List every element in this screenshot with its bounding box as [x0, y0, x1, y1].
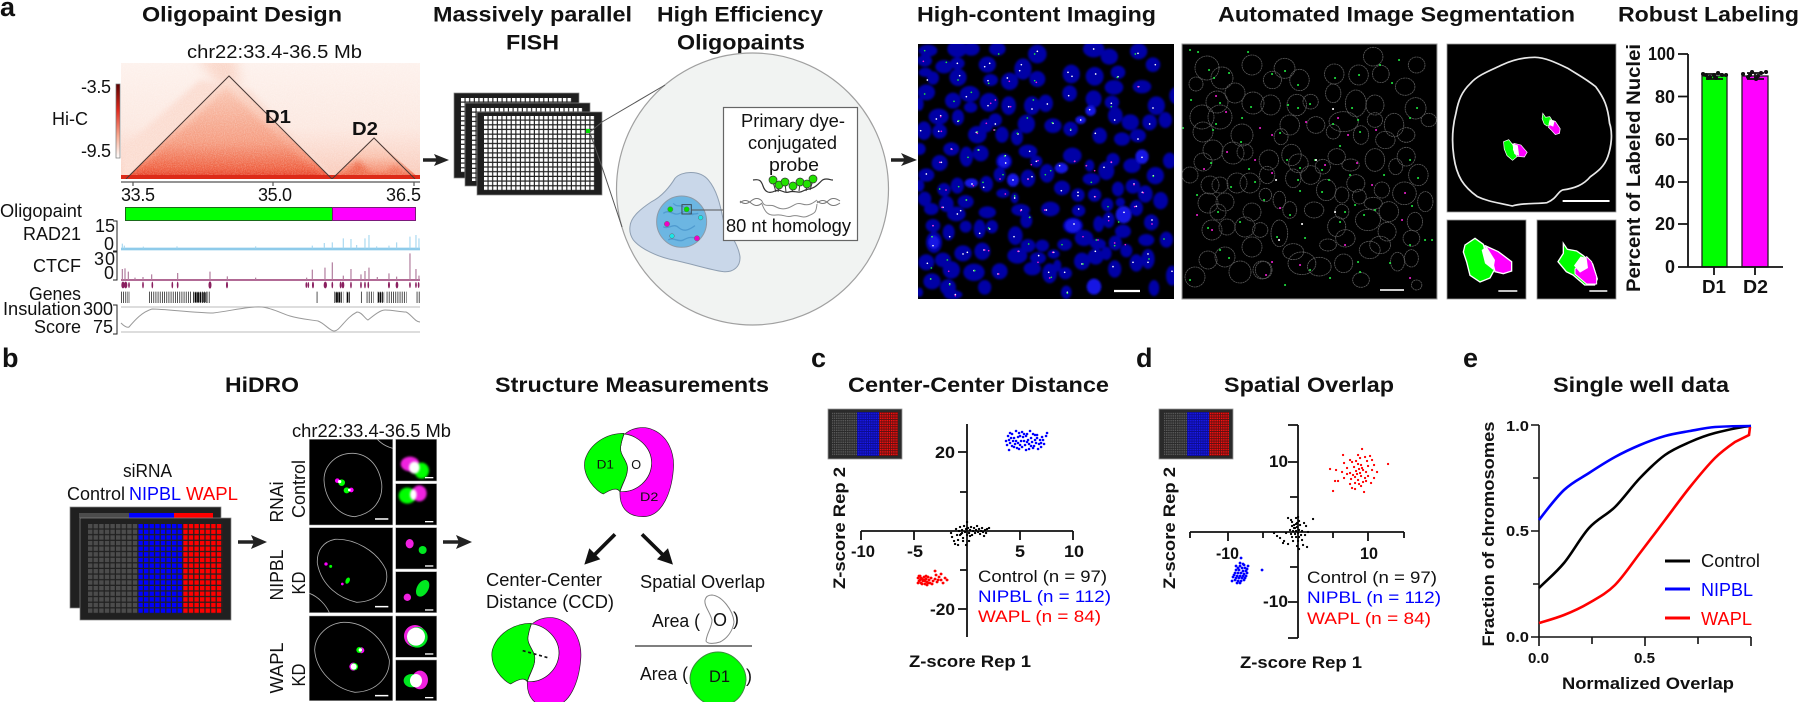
title: Robust Labeling [1618, 2, 1799, 26]
track: insulation score: Score [34, 317, 81, 337]
track: insulation score [3, 299, 420, 337]
axes: 1.0 [1506, 418, 1529, 435]
arrow: plates to images [238, 535, 267, 549]
axes: 20 [935, 443, 955, 462]
track: insulation score: 300 [83, 299, 113, 319]
WAPL foci [349, 625, 433, 698]
siRNA plates [70, 507, 231, 620]
x axis title: Normalized Overlap [1562, 674, 1734, 693]
mini plate [1159, 409, 1233, 459]
panel: high efficiency oligopaints [590, 2, 888, 325]
track: genes: Genes [29, 284, 81, 304]
arrow: images to measurements [443, 535, 472, 549]
track: insulation score: 75 [93, 317, 113, 337]
legend: WAPL [1701, 609, 1752, 629]
title: High Efficiency [657, 2, 823, 26]
scatter: control [1274, 517, 1313, 549]
segmentation image [1182, 44, 1437, 299]
track: RAD21: RAD21 [23, 224, 81, 244]
scatter: WAPL [1330, 449, 1388, 492]
panel label b: b [2, 343, 18, 373]
microscopy image [914, 41, 1181, 299]
segmented nucleus, large [1447, 44, 1616, 212]
label D2: D2 [352, 119, 378, 139]
scatter: NIPBL [1006, 431, 1047, 450]
title: FISH [506, 30, 559, 54]
overlap formula: D1 [709, 667, 730, 686]
label: center-center distance: Distance (CCD) [486, 592, 614, 612]
legend [1665, 551, 1760, 629]
probe inset box [724, 108, 858, 240]
label D1: D1 [265, 107, 291, 127]
heatmap: Hi-C [121, 55, 420, 179]
bar chart: 100 [1648, 44, 1675, 64]
axes: -10 [1263, 592, 1288, 611]
colour scale: Hi-C [52, 109, 88, 129]
bar chart: D2 [1743, 277, 1768, 297]
title: Spatial Overlap [1224, 373, 1394, 397]
panel label c: c [811, 343, 826, 373]
condition labels [267, 460, 309, 694]
axes: 0.0 [1506, 629, 1529, 646]
curve: NIPBL [1539, 426, 1751, 520]
oligopaint track [0, 201, 416, 221]
label: center-center distance: Center-Center [486, 570, 602, 590]
arrow: Hi-C to plates [423, 154, 449, 166]
panel: oligopaint design [0, 2, 421, 337]
axes: 0.5 [1506, 523, 1529, 540]
legend: NIPBL (n = 112) [978, 587, 1111, 606]
domain overlap diagram: D2 [640, 490, 659, 504]
track: RAD21: 15 [95, 216, 115, 236]
scatter: NIPBL [1232, 558, 1262, 583]
title: Oligopaints [677, 30, 805, 54]
bar chart: 40 [1655, 172, 1675, 192]
y axis title: Z-score Rep 2 [1160, 467, 1179, 589]
microscopy grid [309, 439, 437, 701]
y axis title: Fraction of chromosomes [1479, 422, 1498, 646]
track: CTCF: CTCF [33, 256, 81, 276]
panel: massively parallel FISH [433, 2, 632, 195]
legend: Control [1701, 551, 1760, 571]
title: Massively parallel [433, 2, 632, 26]
title: Single well data [1553, 373, 1730, 397]
region label: chr22:33.4-36.5 Mb [187, 42, 362, 62]
scatter: WAPL [918, 571, 947, 585]
condition labels: Control [289, 460, 309, 518]
cell illustration [630, 173, 740, 272]
axes: -10 [1216, 544, 1239, 563]
domain overlap diagram [585, 428, 674, 517]
bar chart [1648, 44, 1783, 297]
panel: spatial overlap scatter [1159, 373, 1441, 672]
panel: high-content imaging [914, 2, 1181, 299]
bar chart: 0 [1665, 257, 1675, 277]
axes: -5 [907, 542, 923, 561]
x axis title: Z-score Rep 1 [909, 652, 1031, 671]
legend: WAPL (n = 84) [978, 607, 1101, 626]
probe text: conjugated [748, 133, 837, 153]
genomic axis: 36.5 [386, 185, 421, 205]
siRNA labels: Control [67, 484, 125, 504]
arrow: to center-center distance [584, 534, 615, 565]
panel: single well data [1479, 373, 1760, 693]
axes: 10 [1064, 542, 1084, 561]
bar chart: D1 [1702, 277, 1726, 297]
legend [1307, 568, 1441, 628]
siRNA labels [67, 461, 238, 504]
legend: NIPBL (n = 112) [1307, 588, 1441, 607]
y axis title: Percent of Labeled Nuclei [1624, 44, 1645, 292]
panel: robust labeling [1618, 2, 1799, 297]
genomic axis: 35.0 [258, 185, 292, 205]
siRNA labels: WAPL [186, 484, 238, 504]
magnifier circle [616, 53, 888, 325]
overlap formula [635, 595, 752, 702]
foci [664, 207, 703, 241]
arrow: probes to imaging [891, 153, 917, 166]
axes [851, 424, 1084, 637]
bar chart: 60 [1655, 130, 1675, 150]
axes: 10 [1269, 452, 1288, 471]
axes: -20 [930, 600, 955, 619]
plate stack [454, 93, 602, 195]
panel: structure measurements [486, 373, 769, 702]
NIPBL foci [324, 539, 433, 610]
track: CTCF: 30 [94, 249, 115, 269]
condition labels: WAPL [267, 642, 287, 694]
panel: HiDRO [67, 373, 472, 701]
title [657, 2, 823, 54]
zoom lines [590, 85, 665, 227]
axes: 0.5 [1634, 650, 1655, 667]
control foci [335, 457, 433, 522]
x axis title: Z-score Rep 1 [1240, 653, 1362, 672]
nucleus [657, 196, 707, 247]
region label: chr22:33.4-36.5 Mb [292, 421, 451, 441]
condition labels: KD [289, 572, 309, 594]
y axis title: Z-score Rep 2 [830, 467, 849, 589]
axes: 10 [1360, 544, 1378, 563]
overlap formula: ) [733, 609, 739, 629]
legend: Control (n = 97) [978, 567, 1107, 586]
axes: 0.0 [1528, 650, 1549, 667]
overlap formula: ) [746, 666, 752, 686]
condition labels: NIPBL [267, 550, 287, 600]
bar chart: 80 [1655, 87, 1675, 107]
domain overlap diagram: O [631, 458, 641, 472]
probe text: probe [769, 155, 819, 175]
oligopaint track: Oligopaint [0, 201, 82, 221]
mini plate [828, 409, 902, 459]
probe text [726, 111, 851, 236]
panel label e: e [1463, 343, 1478, 373]
title: HiDRO [225, 373, 299, 397]
curve: WAPL [1539, 427, 1750, 623]
domain overlap diagram: D1 [597, 457, 614, 471]
siRNA labels: siRNA [123, 461, 172, 481]
title: Structure Measurements [495, 373, 769, 397]
legend: Control (n = 97) [1307, 568, 1437, 587]
genomic axis [121, 182, 421, 205]
title [433, 2, 632, 54]
CCD diagram [492, 618, 581, 702]
axes [1506, 418, 1751, 667]
track: RAD21 [23, 216, 420, 254]
track: CTCF [33, 249, 420, 289]
zoom crops [1447, 220, 1616, 299]
title: Center-Center Distance [848, 373, 1109, 397]
bar chart: 20 [1655, 214, 1675, 234]
legend: NIPBL [1701, 580, 1753, 600]
probe text: Primary dye- [741, 111, 845, 131]
title: High-content Imaging [917, 2, 1156, 26]
siRNA labels: NIPBL [129, 484, 181, 504]
title: Automated Image Segmentation [1218, 2, 1575, 26]
track: CTCF: 0 [104, 263, 114, 283]
colour scale [52, 77, 120, 161]
track: RAD21: 0 [104, 234, 114, 254]
overlap formula: Area ( [640, 664, 688, 684]
condition labels: KD [289, 664, 309, 686]
condition labels: RNAi [267, 482, 287, 522]
colour scale: -3.5 [81, 77, 111, 97]
curve: control [1539, 426, 1751, 588]
probe text: 80 nt homology [726, 216, 851, 236]
colour scale: -9.5 [81, 141, 111, 161]
label: spatial overlap: Spatial Overlap [640, 572, 765, 592]
axes: -10 [851, 542, 875, 561]
panel: center-center distance scatter [828, 373, 1111, 671]
overlap formula: O [713, 610, 727, 630]
title: Oligopaint Design: Oligopaint Design [142, 2, 342, 26]
genomic axis: 33.5 [121, 185, 155, 205]
scatter: control [951, 522, 989, 545]
panel label d: d [1136, 343, 1152, 373]
legend [978, 567, 1111, 626]
overlap formula: Area ( [652, 611, 700, 631]
probe diagram [740, 175, 840, 217]
panel: automated image segmentation [1182, 2, 1616, 299]
track: insulation score: Insulation [3, 299, 81, 319]
axes [1190, 425, 1404, 638]
arrow: to spatial overlap [642, 534, 673, 565]
axes: 5 [1015, 542, 1025, 561]
legend: WAPL (n = 84) [1307, 609, 1431, 628]
label: center-center distance [486, 570, 614, 612]
